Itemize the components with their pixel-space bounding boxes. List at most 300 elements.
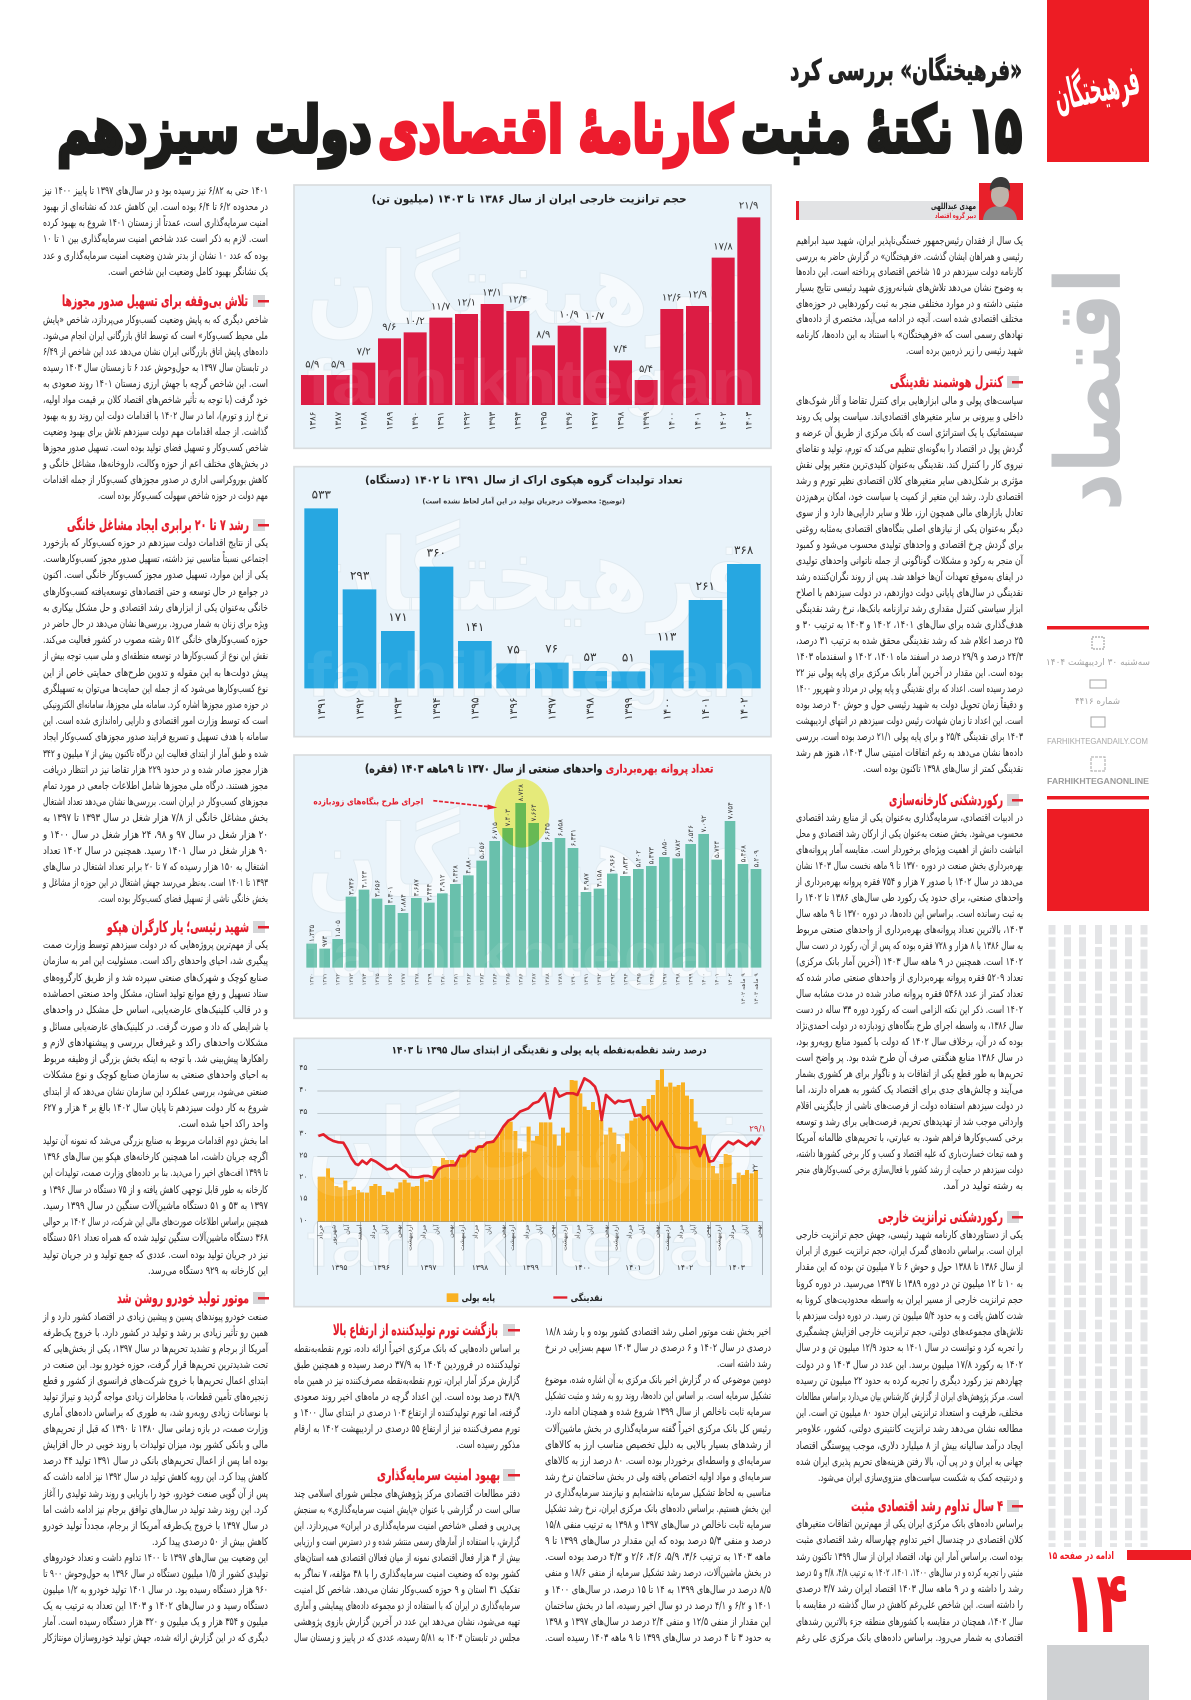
issue info sidebar [1046, 626, 1150, 800]
issue info sidebar: شماره ۴۴۱۶ [1075, 697, 1120, 707]
text block: car production: همین رو تأثیر زیادی بر رشد و تولید در کشور دارد. با خروج یک‌طرفه [43, 1325, 268, 1339]
value labels: ۳،۶۸۷ [413, 879, 421, 896]
end value labels [749, 1124, 766, 1172]
text block: factory building record [795, 811, 1023, 1192]
year labels: ۱۴۰۰ [702, 973, 708, 985]
text column: middle bottom right [544, 1326, 771, 1644]
year labels: ۱۳۹۳ [488, 411, 498, 430]
value labels: ۳،۴۴۴ [426, 883, 434, 901]
bars [301, 217, 760, 405]
value labels: ۶،۵۴۶ [687, 825, 695, 842]
year labels: ۱۳۷۸ [414, 973, 420, 985]
text column: left, continued: ۱۴۰۱ حتی به ۶/۸۲ نیز رسیده بود و در سال‌های ۱۳۹۷ تا پاییز ۱۴۰۰ نیز [42, 185, 268, 197]
year labels: ۱۳۹۱ [584, 973, 590, 985]
value labels: ۱۷۱ [388, 610, 408, 624]
text block: HEPCO workers: مشکلات واحدهای راکد و غیرفعال بررسی و پیشنهادهای لازم و [42, 1037, 268, 1049]
text column: middle bottom right: ۸/۵ درصد در سال‌های ۱۳۹۹ به ۱۴ تا ۱۵ درصد، در سال‌های ۱۴۰۰ و [544, 1584, 771, 1596]
text block: home businesses: ویژه برای زنان به شمار می‌رود. بررسی‌ها نشان می‌دهد در حال حاضر در [42, 618, 268, 630]
year labels: ۱۳۹۲ [462, 411, 472, 430]
text block: four years of positive growth [796, 1518, 1023, 1644]
year labels: ۱۴۰۲ [737, 697, 750, 720]
year labels: ۱۳۸۴ [493, 973, 499, 985]
year labels: ۱۴۰۰ [668, 412, 678, 430]
kicker heading: «فرهیختگان» بررسی کرد [790, 53, 1022, 87]
year labels: ۱۳۷۳ [349, 973, 355, 985]
text block: factory building record: برخی کسب‌وکارها فراهم شود. به عبارتی، با تحریم‌های ظالمانه آمریکا [796, 1131, 1023, 1144]
value labels: ۵،۲۰۲ [635, 850, 643, 867]
text block: car production: با نوسانات زیادی روبه‌رو شد، به طوری که براساس داده‌های آماری [43, 1406, 268, 1419]
text block: producer inflation: تولیدکننده در فروردین ۱۴۰۴ به ۳۷/۹ درصد رسیده و همچنین طبق [294, 1359, 520, 1371]
text block: home businesses: سامانه با هدف تسهیل و تسریع فرایند صدور مجوزهای کسب‌وکار ایجاد [43, 731, 268, 743]
text block: home businesses: در جوامع در حال توسعه و حتی اقتصادهای توسعه‌یافته کسب‌وکارهای [43, 586, 268, 598]
text block: car production: مالی و بانکی کشور بود، میزان تولیدات با روند خوبی در حال افزایش [43, 1439, 268, 1451]
text block: car production: ۹۶۰ هزار دستگاه رسیده بود. در سال ۱۴۰۱ تولید خودرو به ۱/۲ میلیون [43, 1583, 268, 1596]
value labels: ۹/۶ [382, 322, 396, 333]
text column: middle bottom right: رشد داشته است. [717, 1358, 771, 1370]
value labels [305, 201, 758, 375]
x axis dividers [317, 1222, 763, 1275]
logo: Farhikhtegan masthead [1047, 0, 1149, 162]
text block: car production: تولیدی کشور از ۱/۵ میلیون دستگاه در سال ۱۳۹۶ به حول‌وحوش ۹۰۰ تا [43, 1567, 268, 1580]
text block: foreign transit record [795, 1229, 1023, 1484]
chart title: درصد رشد نقطه‌به‌نقطه پایه پولی و نقدینگی از ابتدای سال ۱۳۹۵ تا ۱۴۰۳ [392, 1043, 707, 1056]
chart: base money and liquidity growth: فرهیختگان [307, 1087, 757, 1205]
text block: home businesses: شده و طبق آمار از ابتدای فعالیت این درگاه تاکنون بیش از ۷ میلیون و ۳۴۲ [43, 747, 268, 760]
year labels: ۱۳۷۷ [401, 973, 407, 985]
year labels: ۱۳۷۴ [362, 973, 368, 985]
bars [304, 508, 761, 688]
text column: left, continued: بوده که عدد ۱۰ نشان از بدتر شدن وضعیت امنیت سرمایه‌گذاری و عدد [43, 249, 268, 262]
value labels: ۵،۳۷۳ [648, 847, 656, 864]
month labels: بهمن [756, 1224, 763, 1238]
text block: producer inflation: بر اساس داده‌هایی که بانک مرکزی اخیراً ارائه داده، تورم نقطه‌به‌نقطه [294, 1341, 520, 1355]
text block: HEPCO workers: صنایع کوچک و شهرک‌های صنعتی سپرده شد و از طریق کارگروه‌های [43, 971, 268, 984]
year group labels: ۱۴۰۰ [574, 1263, 591, 1272]
text block: HEPCO workers: ۱۳۹۷ به ۵۳ و ۵۱ دستگاه ماشین‌آلات سنگین در سال ۱۳۹۹ رسید. [43, 1199, 268, 1212]
text column: left, continued: یک نشانگر بهبود کامل وضعیت این شاخص است. [108, 265, 268, 278]
year labels: ۱۳۷۶ [388, 973, 394, 985]
value labels: ۶،۳۳۱ [569, 829, 577, 846]
grey footer block [1047, 1645, 1149, 1700]
value labels: ۳،۹۸۷ [582, 873, 590, 890]
text block: licensing facilitation: در بخش‌های مختلف اعم از حوزه وکالت، داروخانه‌ها، مشاغل خانگی و [42, 457, 268, 470]
value labels: ۷۵ [507, 642, 520, 656]
year labels: ۱۳۸۱ [453, 973, 459, 985]
year labels: ۱۳۹۷ [545, 697, 558, 720]
text block: four years of positive growth: مثبتی را تجربه کرده و در سال‌های ۱۴۰۰، ۱۴۰۱، ۱۴۰۲ به ترتیب ۴/۸، ۳/۸ و ۵ درصد [796, 1567, 1023, 1579]
text block: four years of positive growth: کلان اقتصادی در چندسال اخیر تداوم چهارساله رشد اقتصادی مثبت [796, 1534, 1023, 1546]
text block: home businesses: ۲۰ هزار شغل در سال ۹۷ و ۹۸، ۲۴ هزار شغل در سال ۱۴۰۰ و [42, 829, 268, 841]
text block: investment security: تفکیک ۳۱ استان و ۹ حوزه کسب‌وکار نشان می‌دهد. شاخص کل امنیت [294, 1584, 520, 1596]
chart note: (توضیح: محصولات درجریان تولید در این آمار لحاظ نشده است) [422, 496, 625, 505]
text column: middle bottom right: درصدی در سال ۱۴۰۲ و ۶ درصدی در سال ۱۴۰۳ سهم بسزایی در نرخ [545, 1342, 771, 1354]
month labels: آبان [585, 1224, 594, 1235]
value labels: ۱۴۱ [465, 620, 484, 634]
value labels: ۱۰/۷ [585, 311, 605, 322]
year group labels: ۱۳۹۸ [472, 1263, 488, 1272]
text block: smart liquidity control: درصد رسیده است. اعداد که برای نقدینگی و پایه پولی در مرداد و شهریور ۱۴۰۰ [796, 682, 1023, 695]
chart: foreign transit volume: farhikhtegan [307, 347, 757, 417]
author box: مهدی عبداللهی [931, 202, 976, 212]
continuation note: ادامه در صفحه ۱۵ [1048, 1550, 1114, 1562]
year labels: ۹ ماهه ۱۴۰۲ [741, 973, 747, 1005]
year group labels: ۱۴۰۲ [677, 1263, 693, 1272]
text block: HEPCO workers: این کارخانه به ۹۲۹ دستگاه می‌رسد. [148, 1264, 268, 1277]
y axis labels: ۲۰ [299, 1172, 307, 1181]
year labels: ۱۳۸۶ [519, 973, 525, 985]
value labels: ۵،۶۵۶ [478, 841, 486, 859]
arrow [433, 801, 488, 807]
line: liquidity [318, 1078, 760, 1178]
value labels: ۴،۸۸۰ [465, 856, 473, 874]
text block: factory building record: می‌آیند و چالش‌های جدی برای اقتصاد یک کشور به همراه دارند، اما [796, 1083, 1023, 1096]
text block: smart liquidity control: در ایفای به‌موقع تعهدات آن‌ها خواهد شد. پس از روند نگران‌کننده رشد [796, 570, 1023, 583]
text block: licensing facilitation: کاهش بوروکراسی اداری در صدور مجوزهای کسب‌وکار از جمله اقدامات [43, 474, 268, 486]
main title [57, 94, 1022, 168]
text block: licensing facilitation: خود گرفت (با توجه به تأثیر شاخص‌های اقتصاد کلان بر قیمت مواد اولیه، [43, 392, 268, 406]
year labels: ۱۴۰۱ [693, 412, 703, 430]
text block: foreign transit record: ایجاد درآمد سالیانه بیش از ۸ میلیارد دلاری، موجب پیوستگی اقتصاد [796, 1439, 1023, 1452]
text block: factory building record: سال ۱۳۸۶، به واسطه اجرای طرح بنگاه‌های زودبازده در دولت احمدی‌نژاد [796, 1019, 1023, 1032]
year labels: ۱۳۸۹ [558, 973, 564, 985]
month labels: آبان [380, 1224, 389, 1235]
text column: middle bottom right: ۱۴۰۱ و ۶/۲ و ۴/۱ درصد در دو سال اخیر رسیده، اما در بخش ساختمان [545, 1600, 771, 1612]
year labels: ۱۳۸۹ [385, 411, 395, 430]
text block: home businesses: در حوزه صدور مجوزها اشاره کرد. سامانه ملی مجوزها، سامانه‌ای الکترونیکی [43, 699, 268, 711]
text block: smart liquidity control: و دقیقاً زمان تحویل دولت به شهید رئیسی حول و حوش ۴۰ درصد بوده [796, 697, 1023, 711]
year group labels [331, 1263, 745, 1272]
year group labels: ۱۳۹۹ [522, 1263, 539, 1272]
text block: car production: پس از آن گویی صنعت خودرو، خود را بازیابی و روند رشد تولیدی را آغاز [42, 1487, 268, 1500]
text block: smart liquidity control: نقدینگی کمتر از سال‌های ۱۳۹۸ تاکنون بوده است. [863, 762, 1023, 775]
month labels: مرداد [626, 1225, 633, 1239]
text block: investment security: پی‌درپی و فصلی «شاخص امنیت سرمایه‌گذاری در ایران» می‌پردازد. این [294, 1519, 520, 1532]
value labels: ۴،۱۲۳ [360, 870, 368, 888]
text block: car production [42, 1311, 269, 1644]
year labels: ۱۴۰۲ [728, 973, 734, 985]
year labels: ۱۳۹۰ [571, 973, 577, 985]
year labels: ۱۳۹۲ [353, 697, 366, 720]
text block: home businesses: مجوزهای کسب‌وکار در ایران است. بررسی‌ها نشان می‌دهد تعداد اشتغال [43, 796, 268, 808]
text block: car production: بوده اما پس از اعمال تحریم‌های بانکی در سال ۱۳۹۱ تولید ۴۴ درصد [43, 1455, 268, 1467]
value labels: ۱۲/۱ [457, 298, 476, 309]
text column: right, intro [795, 234, 1023, 357]
value labels: ۳۶۰ [427, 546, 446, 560]
text block: investment security: مجلس در تابستان ۱۴۰۳ به ۵/۸۱ رسیده، عددی که در پاییز و زمستان سال [294, 1632, 520, 1644]
month labels: بهمن [602, 1224, 609, 1238]
year labels: ۱۳۹۸ [676, 973, 682, 985]
text block: smart liquidity control: ۲۵ درصد اعلام شد که رشد نقدینگی محقق شده به ترتیب ۳۱ درصد، [796, 634, 1023, 647]
text block: licensing facilitation: در تابستان سال ۱۳۹۷ به حول‌وحوش عدد ۶ تا زمستان سال ۱۴۰۳ رسیده [43, 362, 268, 374]
value labels: ۱۱/۷ [431, 301, 451, 312]
text column: left, continued: امنیت سرمایه‌گذاری است، عمدتاً از زمستان ۱۴۰۱ شروع به بهبود کرده [43, 215, 268, 229]
value labels: ۵۳ [584, 650, 597, 664]
month labels: بهمن [396, 1224, 403, 1238]
year labels: ۱۳۷۵ [375, 973, 381, 985]
chart title: تعداد تولیدات گروه هپکوی اراک از سال ۱۳۹۱ تا ۱۴۰۲ (دستگاه) [365, 474, 683, 487]
text block: smart liquidity control: دیگر به‌عنوان یکی از نیازهای اصلی بنگاه‌های اقتصادی به‌مثابه روغنی [796, 522, 1023, 535]
month labels: اسفند [357, 1224, 364, 1240]
year labels [310, 973, 760, 1005]
month labels: اردیبهشت [509, 1224, 516, 1251]
year labels: ۱۳۸۷ [532, 973, 538, 985]
text column: middle bottom right: سرمایه‌ای و مواد اولیه اختصاص یافته ولی در بخش ساختمان نرخ رشد [545, 1471, 771, 1483]
text block: smart liquidity control: بوده است. این مقدار در آخرین آمار بانک مرکزی برای پایه پولی نیز ۲۲ [796, 666, 1023, 679]
year labels: ۱۳۹۱ [437, 412, 447, 430]
text block: HEPCO workers: شروع به کار دولت سیزدهم تا پایان سال ۱۴۰۲ بالغ بر ۴ هزار و ۶۲۷ [43, 1102, 268, 1114]
text block: foreign transit record: جهانی به ایران و در پی آن، بالا رفتن هزینه‌های تحریم پذیری ایران شده [796, 1455, 1023, 1468]
value labels: ۵،۸۵۰ [661, 838, 669, 855]
text block: smart liquidity control [795, 394, 1024, 775]
text block: car production: صنعت خودرو پیوندهای پسین و پیشین زیادی در اقتصاد کشور دارد و از [42, 1311, 268, 1323]
year labels: ۱۳۹۹ [689, 973, 695, 985]
text block: four years of positive growth: بوده است. براساس آمار این نهاد، اقتصاد ایران از سال ۱۳۹۹ تاکنون رشد [796, 1550, 1023, 1563]
text block: foreign transit record: است. مرکز پژوهش‌های ایران از گزارش کارشناس بیان می‌دارد براساس مطالعات [796, 1390, 1023, 1403]
value labels: ۷،۶۶۴ [530, 804, 538, 821]
legend [447, 1292, 603, 1304]
text block: factory building record: در ادبیات اقتصادی، سرمایه‌گذاری به‌عنوان یکی از منابع رشد اقتصادی [796, 811, 1023, 824]
value labels: ۶،۶۴۵ [543, 823, 551, 840]
text block: four years of positive growth: سال ۱۴۰۲، همچنان در مقایسه با کشورهای منطقه جزء بالاترین رشدهای [796, 1616, 1023, 1628]
text block: licensing facilitation: است. این شاخص گرچه با جهش ارزی زمستان ۱۴۰۱ روند صعودی به [43, 377, 268, 390]
text block: home businesses: اشتغال به ۱۵۰ هزار رسیده که ۷ تا ۲۰ برابر تعداد اشتغال در سال‌های [43, 861, 268, 873]
value labels: ۷،۷۵۴ [726, 802, 734, 819]
text column: middle bottom right: سرمایه‌ای و واسطه‌ای برخوردار بوده است. ۸۰ درصد ارز به کالاهای [545, 1455, 771, 1467]
text block: investment security: سرمایه‌گذاری در ایران که با استفاده از دو مجموعه داده‌های پیمایشی و آماری [294, 1599, 520, 1612]
year labels: ۱۳۹۴ [430, 697, 443, 720]
year labels: ۱۳۸۷ [334, 411, 344, 430]
year labels: ۱۳۹۱ [315, 697, 328, 720]
value labels: ۸،۷۲۸ [517, 784, 525, 801]
text block: smart liquidity control: است. این اعداد تا زمان شهادت رئیس دولت سیزدهم در انتهای اردیبهشت [796, 715, 1023, 727]
year group labels: ۱۳۹۵ [331, 1263, 348, 1272]
text block: licensing facilitation: داده‌های پایش اتاق بازرگانی ایران نشان می‌دهد عدد این شاخص از ۶/۴۹ [43, 345, 268, 358]
year labels: ۱۳۷۰ [310, 973, 316, 985]
text block: investment security [294, 1488, 520, 1644]
value labels: ۷/۲ [357, 347, 371, 358]
year labels: ۱۳۹۷ [662, 973, 668, 985]
text block: home businesses: بخش مشاغل خانگی از ۷/۸ هزار شغل در سال ۱۳۹۳ تا ۱۳۹۷ به [43, 811, 268, 824]
text block: smart liquidity control: آن منجر به رکود و مشکلات گوناگونی از جمله ناتوانی واحدهای تولیدی [796, 554, 1024, 567]
text block: foreign transit record: یکی از دستاوردهای کارنامه شهید رئیسی، جهش حجم ترانزیت خارجی [796, 1229, 1023, 1241]
chart: HEPCO Arak production: فرهیختگان [307, 517, 757, 635]
heading: foreign transit record: رکوردشکنی ترانزیت خارجی [878, 1208, 1003, 1226]
value labels: ۷۶ [545, 642, 558, 656]
text block: four years of positive growth: را داشته است. این شاخص علی‌رغم کاهش در سال گذشته در مقایسه با [796, 1598, 1023, 1611]
text block: home businesses: مجوز هستند. درگاه ملی مجوزها شامل اطلاعات جامعی در مورد تمام [43, 779, 268, 792]
month labels: بهمن [549, 1224, 556, 1238]
value labels: ۱۲/۹ [688, 290, 707, 301]
text block: foreign transit record: ایران است. براساس داده‌های گمرک ایران، حجم ترانزیت عبوری از ایران [796, 1244, 1023, 1257]
value labels: ۴،۹۶۶ [609, 854, 617, 872]
text block: four years of positive growth: براساس داده‌های بانک مرکزی ایران یکی از مهم‌ترین اتفاقات متغیرهای [796, 1518, 1023, 1530]
value labels [312, 488, 754, 664]
month labels [317, 1224, 763, 1251]
highlight ellipse [494, 779, 549, 848]
heading: car production: موتور تولید خودرو روشن شد [117, 1289, 249, 1307]
text block: factory building record: واحدهای صنعتی، برای حدود یک رکورد طی سال‌های ۱۳۸۶ تا ۱۴۰۲ را [796, 892, 1023, 904]
text block: home businesses: نقش این نوع از کسب‌وکارها در توسعه منطقه‌ای و ملی سبب توجه بیش از [42, 650, 268, 662]
y axis labels: ۴۰ [299, 1085, 307, 1094]
month labels: آبان [342, 1224, 351, 1235]
text block: producer inflation: مذکور رسیده است. [456, 1439, 520, 1451]
text block: foreign transit record: تلاش‌های مجموعه‌های دولتی، حجم ترانزیت خارجی افزایش چشمگیری [796, 1325, 1023, 1338]
text block: factory building record: انباشت دانش از اهمیت ویژه‌ای برخوردار است. مقایسه آمار پروانه‌های [796, 843, 1023, 856]
continuation note [1048, 1550, 1191, 1562]
text block: smart liquidity control: داخلی و بیرونی بر سایر متغیرهای اقتصادی‌اند. سیاست پولی یک روند [796, 411, 1023, 423]
month labels: مرداد [523, 1225, 530, 1239]
text block: factory building record: در دولت سیزدهم استفاده دولت از فرصت‌های ناشی از جایگزینی اقلام [796, 1099, 1023, 1112]
year labels: ۱۴۰۱ [715, 973, 721, 985]
text block: HEPCO workers: تا ۱۳۹۹ افت‌های اخیر را می‌دید. بنا بر داده‌های وزارت صمت، تولیدات این [43, 1167, 268, 1179]
text block: HEPCO workers: به احیای واحدهای صنعتی به سازمان صنایع کوچک و نوع مشکلات [43, 1069, 268, 1081]
text column: right, intro: مختلف اقتصادی شده است. آنچه در ادامه می‌آید، مختصری از داده‌های [796, 312, 1023, 325]
text block: licensing facilitation: گذاشت. از جمله اقدامات مهم دولت سیزدهم تلاش برای بهبود وضعیت [43, 425, 268, 438]
text block: home businesses: خانگی به‌عنوان یکی از ابزارهای رشد اقتصادی و حل مشکل بیکاری به [43, 601, 268, 614]
value labels: ۵/۴ [639, 364, 653, 375]
text block: car production: میلیون و ۳۵۴ هزار و یک میلیون و ۳۲۰ هزار دستگاه رسیده است. آمار [42, 1615, 268, 1628]
callout: early-yield enterprises plan [313, 797, 488, 808]
issue info sidebar: FARHIKHTEGANONLINE [1047, 776, 1149, 786]
value labels: ۲۹۳ [350, 568, 370, 582]
value labels: ۲۶۱ [696, 579, 715, 593]
month labels: اردیبهشت [716, 1224, 723, 1251]
text block: smart liquidity control: داده‌ها نشان می‌دهد به رغم اتفاقات امنیتی سال ۱۴۰۳، هنوز هم رشد [796, 747, 1023, 759]
text column: middle bottom right: مناسبی به لحاظ تشکیل سرمایه نداشته‌ایم و نیازمند سرمایه‌گذاری در [544, 1486, 771, 1499]
text block: home businesses: ۱۳۹۳ تا ۱۴۰۱ است. به‌نظر می‌رسد جهش اشتغال در این حوزه از مشاغل و [42, 877, 268, 889]
text column: right, intro: شهید رئیسی را زیر ذره‌بین برده است. [906, 345, 1023, 357]
month labels: آبان [637, 1224, 646, 1235]
text block: smart liquidity control: سیستماتیک یا یک استراتژی است که بانک مرکزی از طریق آن عرضه و [795, 426, 1023, 439]
text block: foreign transit record: مختلف، ظرفیت و استعداد ترانزیتی ایران حدود ۸۰ میلیون تن است. این [796, 1407, 1023, 1419]
text block: car production: ابتدای اعمال تحریم‌ها با خروج شرکت‌های فرانسوی از کشور و قطع [43, 1375, 268, 1387]
text block: foreign transit record: ۱۴۰۲ به رکورد ۱۷/۸ میلیون برسد. این عدد در سال ۱۴۰۳ و در دولت [796, 1359, 1023, 1371]
text block: factory building record: بهره‌برداری بخش صنعت در دوره ۱۳۷۰ تا ۹ ماهه نخست سال ۱۴۰۳ نشان [796, 860, 1023, 872]
text block: producer inflation: ۳۸/۹ درصد بوده است. این اعداد گرچه در ماه‌های اخیر روند صعودی [294, 1390, 520, 1403]
heading: HEPCO workers: شهید رئیسی؛ یار کارگران هپکو [106, 918, 249, 937]
heading: producer inflation [333, 1321, 520, 1339]
text column: right, intro: یک سال از فقدان رئیس‌جمهور خستگی‌ناپذیر ایران، شهید سید ابراهیم [796, 234, 1023, 247]
text block: factory building record: به رشته تولید در آمد. [943, 1179, 1023, 1192]
heading: four years of positive growth: ۴ سال تداوم رشد اقتصادی مثبت [851, 1497, 1003, 1515]
value labels: ۳۶۸ [734, 543, 754, 557]
year labels: ۹ ماهه ۱۴۰۳ [754, 973, 760, 1005]
text column: left, continued: در محدوده ۶/۲ تا ۶/۴ بوده است. این کاهش عدد که نشانه‌ای از بهبود [43, 201, 268, 213]
text block: foreign transit record: را تجربه کرد و توانست در سال ۱۴۰۱ به حدود ۱۲/۹ میلیون تن و در سال [796, 1342, 1023, 1354]
year labels: ۱۳۹۵ [636, 973, 642, 985]
month labels: مرداد [575, 1225, 582, 1239]
text column: middle bottom right: سرمایه ثابت ناخالص از سال ۱۳۹۹ شروع شده و همچنان ادامه دارد. [545, 1406, 771, 1418]
value labels: ۱۲/۴ [508, 295, 527, 306]
text block: foreign transit record: چهاردهم نیز رکورد دیگری را تجربه کرده به حدود ۲۲ میلیون تن رسیده [796, 1374, 1023, 1387]
year group labels: ۱۴۰۳ [728, 1263, 745, 1272]
value labels: ۵۱ [622, 650, 635, 664]
value labels: ۲،۸۸۴ [399, 894, 407, 911]
text column: middle bottom right: تشکیل سرمایه است. بر اساس این داده‌ها، روند رو به رشد و مثبت تشکیل [545, 1390, 771, 1402]
month labels: مرداد [677, 1225, 684, 1239]
chart: foreign transit volume: farhikhtegan [307, 347, 757, 417]
text column: middle bottom right: این بخش هستیم. براساس داده‌های بانک مرکزی ایران، نرخ رشد تشکیل [545, 1503, 771, 1515]
value labels: ۷،۴۰۳ [504, 809, 512, 826]
year labels: ۱۳۹۶ [507, 697, 520, 720]
value labels: ۹۷۳ [321, 935, 329, 947]
text block: HEPCO workers: ستاد تسهیل و رفع موانع تولید استان، مشکل واحد صنعتی احصاشده [43, 988, 268, 1000]
year labels: ۱۳۸۲ [466, 973, 472, 985]
year labels: ۱۳۹۳ [392, 697, 405, 720]
value labels: ۵/۹ [331, 360, 345, 371]
text block: smart liquidity control: ۱۴۰۳ برای نقدینگی ۲۵/۴ و برای پایه پولی ۲۱/۱ درصد بوده است. بررسی [796, 730, 1023, 743]
month labels: بهمن [447, 1224, 454, 1238]
text block: home businesses: است که توسط وزارت امور اقتصادی و دارایی راه‌اندازی شده است. این [43, 715, 268, 727]
text block: home businesses: پیش دولت‌ها به این مقوله و تدوین طرح‌های حمایتی خاص از این [43, 667, 268, 679]
text column: right, intro: مثبتی داشته و در موارد مختلفی منجر به ثبت رکوردهایی در حوزه‌های [796, 298, 1023, 310]
text block: factory building record: در سال ۱۳۸۶ منابع هنگفتی صرف آن طرح شده بود. پر واضح است [796, 1051, 1023, 1064]
year labels: ۱۳۸۸ [360, 411, 370, 430]
icon: calendar [1092, 637, 1104, 649]
main title: دولت سیزدهم [57, 94, 372, 168]
text block: car production: این وضعیت بین سال‌های ۱۳۹۷ تا ۱۴۰۰ تداوم داشت و تعداد خودروهای [43, 1552, 268, 1564]
text block: factory building record: محسوب می‌شود. بخش صنعت به‌عنوان یکی از ارکان رشد اقتصادی و محل [796, 828, 1023, 840]
year labels [315, 697, 750, 720]
text block: factory building record: تعداد ۵۲۰۹ فقره پروانه بهره‌برداری از واحدهای صنعتی صادر شده که [796, 972, 1023, 984]
text block: factory building record: ۱۴۰۲ است. همچنین در ۹ ماهه سال ۱۴۰۳ (آخرین آمار بانک مرکزی) [796, 955, 1023, 968]
value labels: ۷/۴ [613, 344, 627, 355]
month labels: مرداد [729, 1225, 736, 1239]
year labels: ۱۳۷۹ [427, 973, 433, 985]
year labels: ۱۴۰۰ [660, 697, 673, 720]
year labels: ۱۴۰۲ [719, 411, 729, 430]
text column: middle bottom right: از رشدهای بسیار بالایی به دلیل تخصیص مناسب ارز به کالاهای [545, 1439, 771, 1451]
chart title: حجم ترانزیت خارجی ایران از سال ۱۳۸۶ تا ۱۴۰۳ (میلیون تن) [372, 193, 687, 206]
text column: middle bottom right: درصد و منفی ۵/۳ درصد بوده که این مقدار در سال‌های ۱۳۹۹ تا ۹ [545, 1535, 771, 1547]
text block: smart liquidity control: نیروی کار را کنترل کند. نقدینگی به‌عنوان کلیدی‌ترین متغیر پولی نقش [796, 458, 1023, 471]
month labels: اردیبهشت [561, 1224, 568, 1251]
heading: factory building record: رکوردشکنی کارخانه‌سازی [889, 791, 1003, 809]
year labels: ۱۳۸۰ [440, 973, 446, 985]
text block: factory building record: بوده که در آن، برخلاف سال ۱۴۰۲ که دولت با کمبود منابع روبه‌رو بود، [796, 1035, 1023, 1048]
text block: producer inflation: تورم مصرف‌کننده نیز از ارتفاع ۵۵ درصدی در اردیبهشت ۱۴۰۲ به ارقام [294, 1423, 520, 1435]
main title: کارنامهٔ اقتصادی [378, 94, 734, 168]
text block: four years of positive growth: رشد را داشته و در ۹ ماهه سال ۱۴۰۳ اقتصاد ایران رشد ۳/۷ درصدی [796, 1583, 1023, 1595]
text block: investment security: سالی است در گزارشی با عنوان «پایش امنیت سرمایه‌گذاری» به سنجش [294, 1503, 520, 1516]
text column: middle bottom right: اخیر بخش نفت موتور اصلی رشد اقتصادی کشور بوده و با رشد ۱۸/۸ [545, 1326, 771, 1338]
text block: investment security: گزارش، با استفاده از آمارهای رسمی منتشر شده و در دسترس است و ارزیابی [294, 1535, 520, 1548]
value labels: ۶،۸۵۸ [556, 819, 564, 836]
chart title: تعداد پروانه بهره‌برداری واحدهای صنعتی از سال ۱۳۷۰ تا ۹ماهه ۱۴۰۳ (فقره) [365, 762, 713, 776]
chart: industrial operating licences: farhikhtegan [307, 921, 757, 991]
y axis labels: ۳۰ [299, 1129, 307, 1138]
text block: licensing facilitation: شاخص کسب‌وکار و تسهیل فضای تولید بوده است. تسهیل صدور مجوزها [43, 442, 268, 454]
legend: نقدینگی [571, 1292, 603, 1304]
heading: investment security: بهبود امنیت سرمایه‌گذاری [377, 1466, 500, 1484]
value labels: ۷،۰۹۲ [700, 815, 708, 832]
text block: investment security: تهیه می‌شود، نشان می‌دهد این عدد در آخرین گزارش بازوی پژوهشی [294, 1615, 520, 1628]
year labels: ۱۳۹۲ [597, 973, 603, 985]
text block: investment security: بیش از ۳ هزار فعال اقتصادی نمونه از میان فعالان اقتصادی همه استان‌های [294, 1552, 520, 1564]
text block: factory building record: به ثبت رسانده است. براساس این داده‌ها، در دوره ۱۳۷۰ تا ۹ ماهه سال [796, 908, 1023, 920]
year labels: ۱۳۷۱ [323, 973, 329, 985]
bars: base money [318, 1069, 758, 1222]
year labels: ۱۳۹۵ [468, 697, 481, 720]
chart: base money and liquidity growth: farhikhtegan [307, 1211, 757, 1281]
chart: base money and liquidity growth [294, 1038, 771, 1307]
y axis labels: ۲۵ [299, 1150, 307, 1159]
text column: right, intro: نهادهای رسمی است که «فرهیختگان» با استناد به این داده‌ها، کارنامه [796, 328, 1023, 341]
month labels: اردیبهشت [459, 1224, 466, 1251]
month labels: بهمن [500, 1224, 507, 1238]
text block: producer inflation: گزارش مرکز آمار ایران، تورم نقطه‌به‌نقطه مصرف‌کننده نیز در همین ماه [294, 1374, 520, 1387]
value labels: ۱۱۳ [657, 629, 677, 643]
